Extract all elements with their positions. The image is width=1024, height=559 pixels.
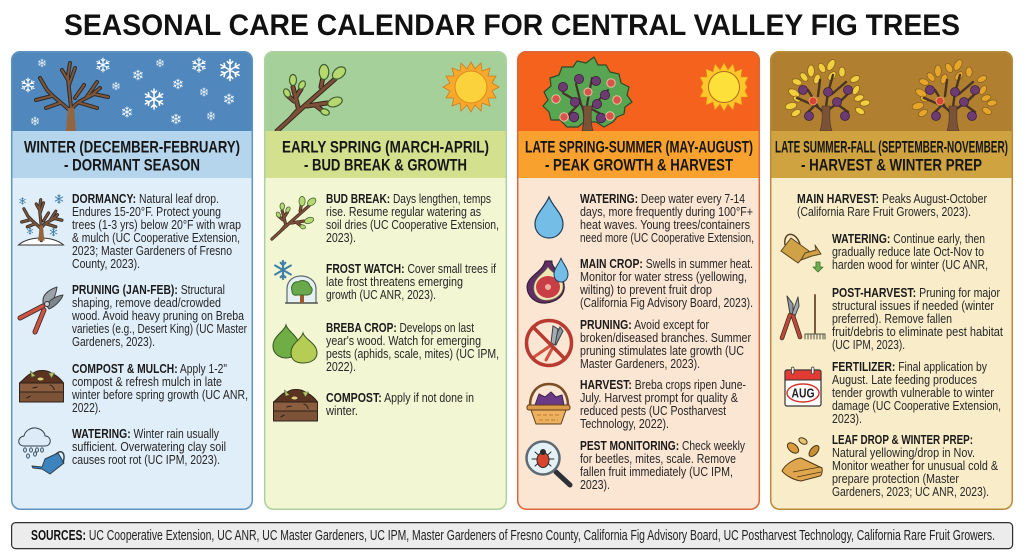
text: dormancy: 2023; Master Gardeners of Fresno: [72, 243, 232, 258]
text: leaf drop and winter prep: LEAF DROP & WINTER PREP:: [832, 432, 973, 447]
sources bar: [12, 523, 1013, 549]
text: watering: [580, 191, 754, 245]
text: pruning: PRUNING: Avoid except for: [580, 317, 709, 332]
text: breba crop: 2022).: [326, 359, 356, 374]
summer heading: LATE SPRING-SUMMER (MAY-AUGUST): [525, 138, 753, 156]
text: bud break: soil dries (UC Cooperative Extension,: [326, 217, 499, 232]
text: leaf drop and winter prep: prepare protection (Master: [832, 471, 959, 486]
spring heading: EARLY SPRING (MARCH-APRIL): [282, 138, 489, 156]
spring heading: - BUD BREAK & GROWTH: [304, 156, 467, 174]
text: main crop: [579, 256, 753, 310]
icon: pruners: [20, 287, 63, 332]
text: breba crop: BREBA CROP: Develops on last: [326, 320, 474, 335]
text: watering: sufficient. Overwatering clay soil: [72, 439, 226, 454]
text: pruning: [580, 317, 751, 371]
text: watering: causes root rot (UC IPM, 2023).: [72, 452, 220, 467]
text: pest monitoring: [580, 438, 745, 492]
text: main harvest: [797, 191, 987, 219]
icon: bud branch: [272, 196, 317, 239]
winter heading: - DORMANT SEASON: [64, 156, 200, 174]
text: harvest: Technology, 2022).: [580, 416, 669, 431]
fall heading: - HARVEST & WINTER PREP: [801, 156, 982, 174]
icon: watering can with down arrow: [781, 234, 823, 272]
text: fertilizer: 2023).: [832, 411, 862, 426]
text: watering: WATERING: Deep water every 7-14: [580, 191, 745, 206]
text: post-harvest: preferred). Remove fallen: [832, 311, 952, 326]
text: bud break: [326, 191, 499, 245]
text: dormancy: trees (1-3 yrs) below 20°F with wrap: [72, 217, 241, 232]
text: watering: heat waves. Young trees/containers: [580, 217, 750, 232]
text: pruning: pruning stimulates late growth (UC: [580, 343, 744, 358]
text: compost and mulch: 2022).: [72, 400, 101, 415]
text: frost watch: FROST WATCH: Cover small trees if: [326, 261, 496, 276]
text: pruning: PRUNING (JAN-FEB): Structural: [72, 282, 225, 297]
spring heading: [265, 131, 506, 178]
icon: frost cover: [275, 261, 318, 303]
icon: fallen leaves and blanket: [782, 436, 822, 481]
icon: harvest basket: [527, 384, 570, 424]
text: harvest: reduced pests (UC Postharvest: [580, 403, 726, 418]
text: post-harvest: [832, 285, 1003, 352]
icon: no pruning: [526, 320, 572, 366]
fall banner: [770, 51, 1013, 131]
text: harvest: July. Harvest prompt for quality &: [580, 390, 738, 405]
text: main crop: MAIN CROP: Swells in summer heat.: [580, 256, 753, 271]
text: compost: [325, 390, 474, 418]
fig tree: [543, 57, 632, 131]
icon: August calendar: AUG: [792, 386, 814, 400]
summer heading: - PEAK GROWTH & HARVEST: [545, 156, 734, 174]
icon: water drop: [535, 197, 563, 238]
icon: pruners and rake: [782, 295, 825, 339]
text: bud break: 2023).: [326, 230, 356, 245]
text: frost watch: late frost threatens emerging: [326, 274, 463, 289]
summer heading: [518, 131, 759, 178]
text: frost watch: [326, 261, 496, 302]
text: main harvest: MAIN HARVEST: Peaks August-October: [797, 191, 987, 206]
text: pruning: broken/diseased branches. Summer: [580, 330, 751, 345]
text: dormancy: [72, 191, 241, 271]
icon: cut fig with water drop: [527, 258, 568, 303]
text: watering: gradually reduce late Oct-Nov to: [832, 244, 984, 259]
text: breba crop: [326, 320, 499, 374]
text: watering: harden wood for winter (UC ANR,: [832, 257, 988, 272]
text: main harvest: (California Rare Fruit Growers, 2023).: [797, 204, 971, 219]
winter heading: [12, 131, 252, 178]
text: post-harvest: POST-HARVEST: Pruning for major: [832, 285, 1000, 300]
winter heading: WINTER (DECEMBER-FEBRUARY): [24, 138, 240, 156]
panel: late spring-summer: [517, 51, 760, 510]
text: harvest: HARVEST: Breba crops ripen June-: [580, 377, 746, 392]
text: pruning: varieties (e.g., Desert King) (UC Master: [72, 321, 247, 336]
text: main crop: wilting) to prevent fruit drop: [579, 282, 712, 297]
text: watering: need more (UC Cooperative Extension,: [580, 230, 754, 245]
icon: August calendar: [785, 367, 821, 406]
text: watering: WATERING: Continue early, then: [832, 231, 985, 246]
text: post-harvest: (UC IPM, 2023).: [832, 337, 905, 352]
text: bud break: BUD BREAK: Days lengthen, temps: [326, 191, 491, 206]
text: harvest: [580, 377, 746, 431]
icon: magnifier with beetle: [526, 442, 570, 485]
text: compost and mulch: [71, 361, 248, 415]
text: pest monitoring: fallen fruit immediately (UC IPM,: [580, 464, 733, 479]
text: breba crop: year's wood. Watch for emerging: [326, 333, 481, 348]
text: dormancy: DORMANCY: Natural leaf drop.: [72, 191, 219, 206]
text: watering: WATERING: Winter rain usually: [72, 426, 219, 441]
text: watering: [72, 426, 226, 467]
icon: compost crate: [274, 389, 318, 421]
text: pest monitoring: PEST MONITORING: Check weekly: [580, 438, 745, 453]
text: fertilizer: August. Late feeding produces: [832, 372, 977, 387]
text: pruning: shaping, remove dead/crowded: [72, 295, 221, 310]
text: compost and mulch: winter before spring growth (UC ANR,: [71, 387, 248, 402]
panel: early spring: [264, 51, 507, 510]
text: dormancy: County, 2023).: [72, 256, 140, 271]
text: watering: [832, 231, 988, 272]
panel: late summer-fall: [770, 51, 1013, 510]
text: fertilizer: [832, 359, 1001, 426]
text: pruning: wood. Avoid heavy pruning on Breba: [71, 308, 244, 323]
text: dormancy: Endures 15-20°F. Protect young: [72, 204, 221, 219]
icon: breba figs: [273, 325, 317, 363]
text: breba crop: pests (aphids, scale, mites) (UC IPM,: [326, 346, 499, 361]
text: pest monitoring: 2023).: [580, 477, 610, 492]
icon: dormant tree: [18, 195, 64, 245]
icon: compost crate: [20, 370, 64, 402]
text: frost watch: growth (UC ANR, 2023).: [326, 287, 436, 302]
text: fertilizer: FERTILIZER: Final application by: [832, 359, 987, 374]
text: compost: COMPOST: Apply if not done in: [326, 390, 474, 405]
panel: winter: [11, 51, 253, 510]
text: compost and mulch: COMPOST & MULCH: Apply 1-2": [72, 361, 227, 376]
summer banner: [517, 51, 760, 131]
text: compost and mulch: compost & refresh mulch in late: [72, 374, 222, 389]
text: pruning: [71, 282, 247, 349]
text: bud break: rise. Resume regular watering as: [326, 204, 481, 219]
sun icon: [700, 63, 748, 111]
spring banner: [264, 51, 507, 131]
text: watering: days, more frequently during 100°F+: [580, 204, 753, 219]
winter banner: [11, 51, 253, 131]
sun icon: [443, 62, 499, 112]
text: pruning: Master Gardeners, 2023).: [580, 356, 700, 371]
text: leaf drop and winter prep: Natural yellowing/drop in Nov.: [832, 445, 975, 460]
text: leaf drop and winter prep: [832, 432, 998, 499]
fall heading: [771, 131, 1012, 178]
text: main crop: (California Fig Advisory Board, 2023).: [580, 295, 753, 310]
text: compost: winter.: [325, 403, 358, 418]
text: pruning: Gardeners, 2023).: [72, 334, 155, 349]
text: main crop: Monitor for water stress (yellowing,: [580, 269, 747, 284]
icon: rain and watering can: [19, 428, 64, 474]
title: SEASONAL CARE CALENDAR FOR CENTRAL VALLEY FIG TREES: [64, 9, 960, 42]
text: dormancy: & mulch (UC Cooperative Extension,: [72, 230, 240, 245]
text: pest monitoring: for beetles, mites, scale. Remove: [580, 451, 736, 466]
